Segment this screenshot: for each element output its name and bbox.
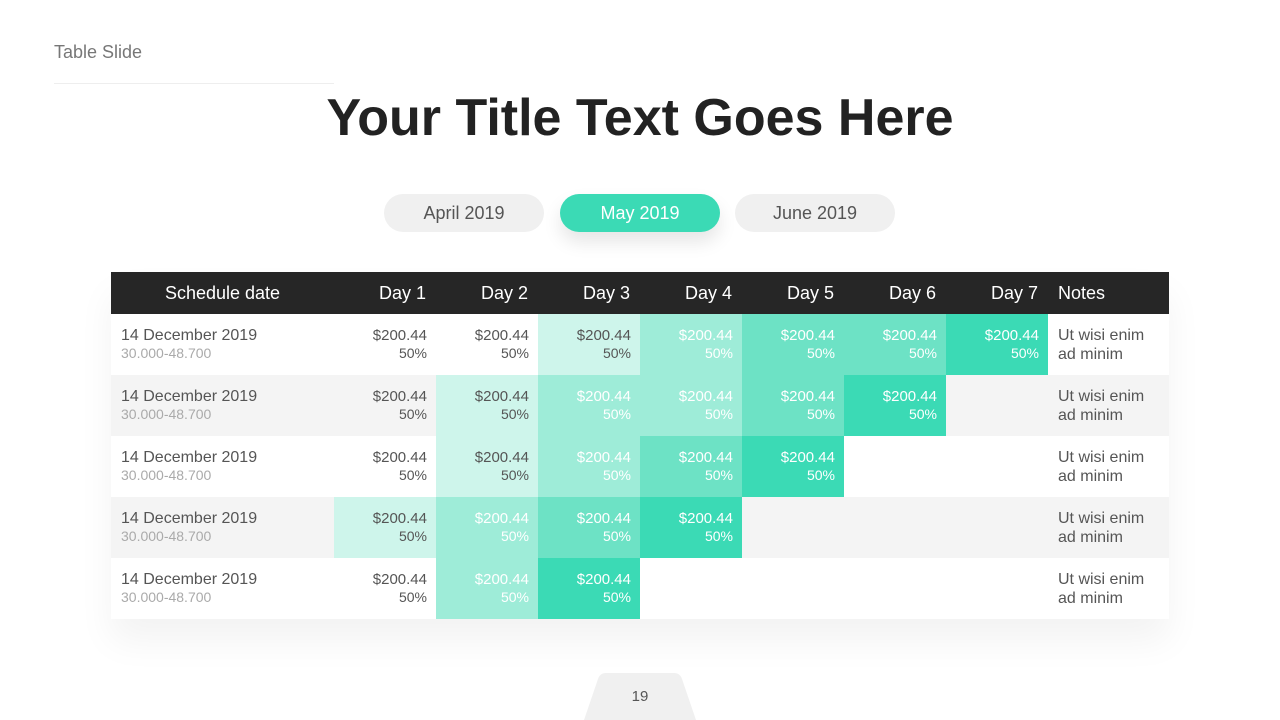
schedule table: $200.44 — [577, 388, 631, 404]
schedule table: 50% — [399, 344, 427, 360]
schedule table: Day 7 — [991, 282, 1038, 302]
schedule table: 30.000-48.700 — [121, 345, 211, 361]
schedule table: 14 December 2019 — [121, 449, 257, 466]
schedule table: 50% — [399, 406, 427, 422]
schedule table: 50% — [807, 344, 835, 360]
schedule table: 30.000-48.700 — [121, 528, 211, 544]
schedule table: Ut wisi enim — [1058, 510, 1144, 526]
schedule table: ad minim — [1058, 346, 1123, 362]
schedule table: 50% — [399, 588, 427, 604]
schedule table: $200.44 — [373, 570, 427, 588]
tab: April: April 2019 — [423, 203, 505, 223]
schedule table: 30.000-48.700 — [121, 589, 211, 605]
schedule table: 14 December 2019 — [121, 388, 257, 405]
schedule table: 50% — [807, 406, 835, 422]
tab: June — [735, 194, 895, 232]
schedule table: $200.44 — [577, 326, 631, 344]
schedule table: $200.44 — [475, 326, 529, 344]
schedule table: ad minim — [1058, 528, 1123, 546]
schedule table: Day 3 — [583, 282, 630, 302]
schedule table: $200.44 — [985, 326, 1039, 344]
schedule table: 14 December 2019 — [121, 510, 257, 527]
schedule table: 50% — [705, 528, 733, 544]
schedule table: 50% — [705, 466, 733, 482]
schedule table: $200.44 — [475, 570, 529, 588]
tab: May (active): May 2019 — [600, 203, 680, 223]
schedule table: $200.44 — [373, 326, 427, 344]
schedule table: $200.44 — [679, 388, 733, 404]
schedule table: Day 6 — [889, 282, 936, 302]
schedule table: $200.44 — [781, 326, 835, 344]
schedule table: 50% — [909, 406, 937, 422]
schedule table: 30.000-48.700 — [121, 406, 211, 422]
page number — [584, 673, 696, 720]
schedule table: $200.44 — [883, 388, 937, 404]
schedule table: $200.44 — [577, 510, 631, 526]
schedule table: 50% — [501, 588, 529, 604]
schedule table: 50% — [603, 588, 631, 604]
tab: June: June 2019 — [773, 203, 857, 223]
schedule table: $200.44 — [475, 388, 529, 404]
schedule table: Day 5 — [787, 282, 834, 302]
schedule table: $200.44 — [577, 448, 631, 466]
schedule table: 50% — [603, 466, 631, 482]
schedule table: 50% — [603, 406, 631, 422]
schedule table: Ut wisi enim — [1058, 326, 1144, 344]
schedule table: $200.44 — [679, 510, 733, 526]
schedule table: 50% — [501, 466, 529, 482]
schedule table: $200.44 — [475, 448, 529, 466]
schedule table: $200.44 — [475, 510, 529, 526]
schedule table: Schedule date — [165, 282, 280, 302]
schedule table: 14 December 2019 — [121, 571, 257, 588]
title: Your Title Text Goes Here — [326, 89, 954, 147]
tabs — [384, 194, 895, 246]
schedule table: $200.44 — [577, 570, 631, 588]
schedule table: $200.44 — [781, 448, 835, 466]
schedule table: 50% — [501, 528, 529, 544]
page number: 19 — [632, 688, 648, 705]
schedule table: Notes — [1058, 282, 1105, 302]
schedule table: $200.44 — [781, 388, 835, 404]
schedule table: 50% — [705, 344, 733, 360]
schedule table: Ut wisi enim — [1058, 388, 1144, 404]
schedule table: 50% — [909, 344, 937, 360]
schedule table: Ut wisi enim — [1058, 570, 1144, 588]
schedule table: 50% — [807, 466, 835, 482]
schedule table: $200.44 — [883, 326, 937, 344]
schedule table: $200.44 — [373, 448, 427, 466]
schedule table: 14 December 2019 — [121, 327, 257, 344]
schedule table: $200.44 — [373, 510, 427, 526]
schedule table: 50% — [705, 406, 733, 422]
schedule table — [111, 272, 1169, 619]
header label: Table Slide — [54, 42, 142, 62]
schedule table: Day 1 — [379, 282, 426, 302]
schedule table: 50% — [603, 344, 631, 360]
schedule table: 50% — [501, 344, 529, 360]
tab: May (active) — [560, 194, 720, 232]
schedule table: 50% — [603, 528, 631, 544]
schedule table: ad minim — [1058, 590, 1123, 606]
schedule table: Day 2 — [481, 282, 528, 302]
schedule table: $200.44 — [679, 326, 733, 344]
schedule table: 50% — [399, 466, 427, 482]
schedule table: ad minim — [1058, 406, 1123, 424]
tab: April — [384, 194, 544, 232]
schedule table: Day 4 — [685, 282, 732, 302]
schedule table: $200.44 — [679, 448, 733, 466]
schedule table: ad minim — [1058, 468, 1123, 484]
schedule table: 50% — [1011, 344, 1039, 360]
schedule table: $200.44 — [373, 388, 427, 404]
schedule table: Ut wisi enim — [1058, 448, 1144, 466]
schedule table: 30.000-48.700 — [121, 467, 211, 483]
schedule table: 50% — [399, 528, 427, 544]
schedule table: 50% — [501, 406, 529, 422]
